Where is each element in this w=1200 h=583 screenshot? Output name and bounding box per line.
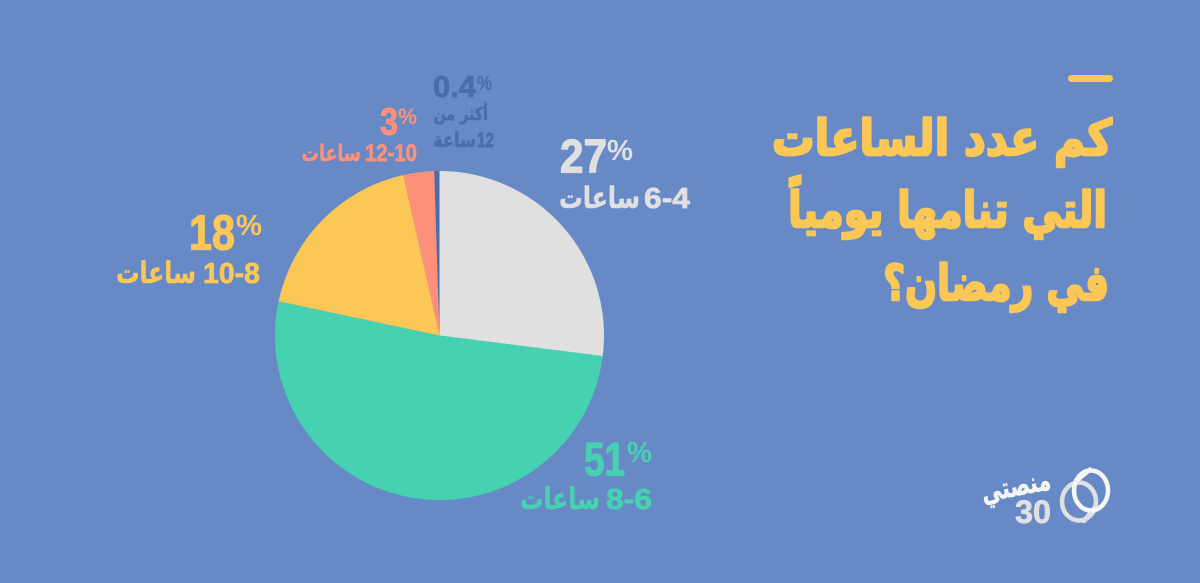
logo number: 30 (1015, 494, 1051, 530)
title: التي تنامها يومياً (788, 175, 1107, 239)
label: 51% 6-8 hours: ساعات (520, 482, 600, 517)
slice: 10-12 hours 3% (403, 171, 440, 336)
label: 51% 6-8 hours (520, 432, 652, 517)
label: 0.4% more than 12 hours: ساعة (433, 129, 476, 153)
label: 27% 4-6 hours: 27 (560, 130, 607, 182)
label: 18% 8-10 hours (116, 206, 262, 291)
label: 27% 4-6 hours: 6-4 (644, 183, 690, 215)
slice: 6-8 hours 51% (275, 301, 603, 500)
label: 0.4% more than 12 hours: 12 (477, 129, 494, 152)
label: 51% 6-8 hours: % (627, 437, 652, 469)
pie chart: daily sleep hours (275, 171, 604, 500)
label: 27% 4-6 hours: % (607, 135, 633, 167)
label: 51% 6-8 hours: 51 (584, 432, 625, 486)
logo: Minassati 30 (978, 463, 1108, 530)
label: 27% 4-6 hours (559, 130, 690, 216)
label: 0.4% more than 12 hours: % (477, 72, 492, 95)
title: كم عدد الساعات (772, 109, 1112, 167)
label: 0.4% more than 12 hours: أكثر من (434, 102, 488, 124)
label: 51% 6-8 hours: 8-6 (606, 484, 652, 516)
logo icon: overlapping rings (1062, 470, 1108, 521)
title (772, 109, 1112, 312)
label: 18% 8-10 hours: ساعات (116, 256, 196, 291)
label: 3% 10-12 hours: 12-10 (365, 140, 417, 167)
logo wordmark: منصتي (978, 463, 1053, 509)
slice: more than 12 hours 0.4% (434, 171, 440, 336)
label: 18% 8-10 hours: 10-8 (203, 258, 260, 290)
title accent bar (1068, 75, 1113, 82)
label: 0.4% more than 12 hours: 0.4 (433, 69, 477, 104)
slice: 4-6 hours 27% (440, 171, 604, 356)
label: 3% 10-12 hours: ساعات (302, 140, 361, 167)
label: 3% 10-12 hours: % (398, 104, 417, 129)
title: في رمضان؟ (883, 255, 1109, 312)
label: 18% 8-10 hours: 18 (189, 206, 235, 260)
label: 0.4% more than 12 hours (433, 69, 494, 153)
label: 3% 10-12 hours (302, 102, 417, 167)
slice: 8-10 hours 18% (279, 175, 440, 336)
label: 18% 8-10 hours: % (236, 210, 262, 242)
label: 27% 4-6 hours: ساعات (559, 181, 640, 216)
label: 3% 10-12 hours: 3 (380, 102, 398, 144)
